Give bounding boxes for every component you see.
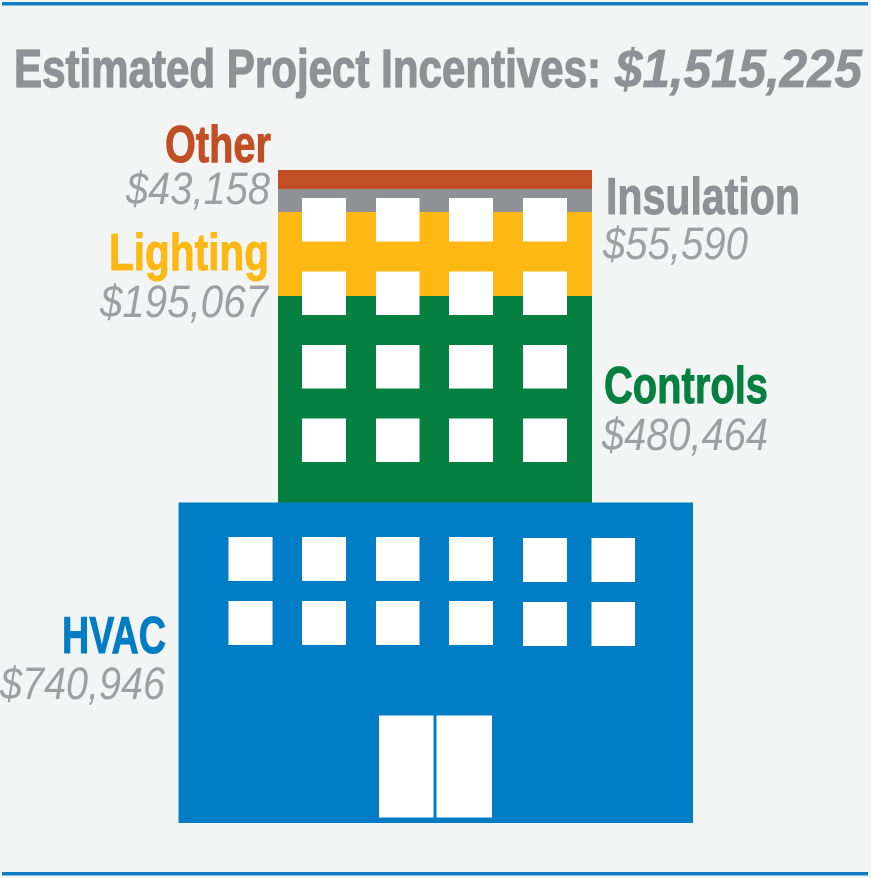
lower block windows	[228, 537, 635, 646]
title: Estimated Project Incentives:	[14, 39, 601, 99]
label: controls	[601, 357, 768, 460]
label: controls: $480,464	[601, 409, 768, 460]
label: lighting	[99, 224, 270, 327]
upper tower: controls segment	[278, 296, 592, 503]
double door	[379, 716, 492, 818]
upper tower: lighting segment	[278, 212, 592, 296]
label: hvac	[0, 607, 166, 709]
label: hvac: $740,946	[0, 658, 166, 709]
upper tower: insulation segment	[278, 189, 592, 212]
tower windows	[302, 198, 567, 462]
label: insulation: Insulation	[606, 168, 800, 226]
upper tower: other segment	[278, 170, 592, 189]
label: insulation	[602, 168, 800, 269]
lower block: HVAC segment	[178, 502, 693, 823]
label: other: Other	[165, 116, 271, 174]
label: other	[125, 116, 271, 214]
label: lighting: Lighting	[109, 224, 269, 282]
building illustration	[178, 170, 693, 823]
label: insulation: $55,590	[602, 218, 748, 269]
label: controls: Controls	[604, 357, 768, 415]
label: lighting: $195,067	[99, 276, 270, 327]
label: hvac: HVAC	[62, 607, 166, 665]
label: other: $43,158	[125, 163, 270, 214]
